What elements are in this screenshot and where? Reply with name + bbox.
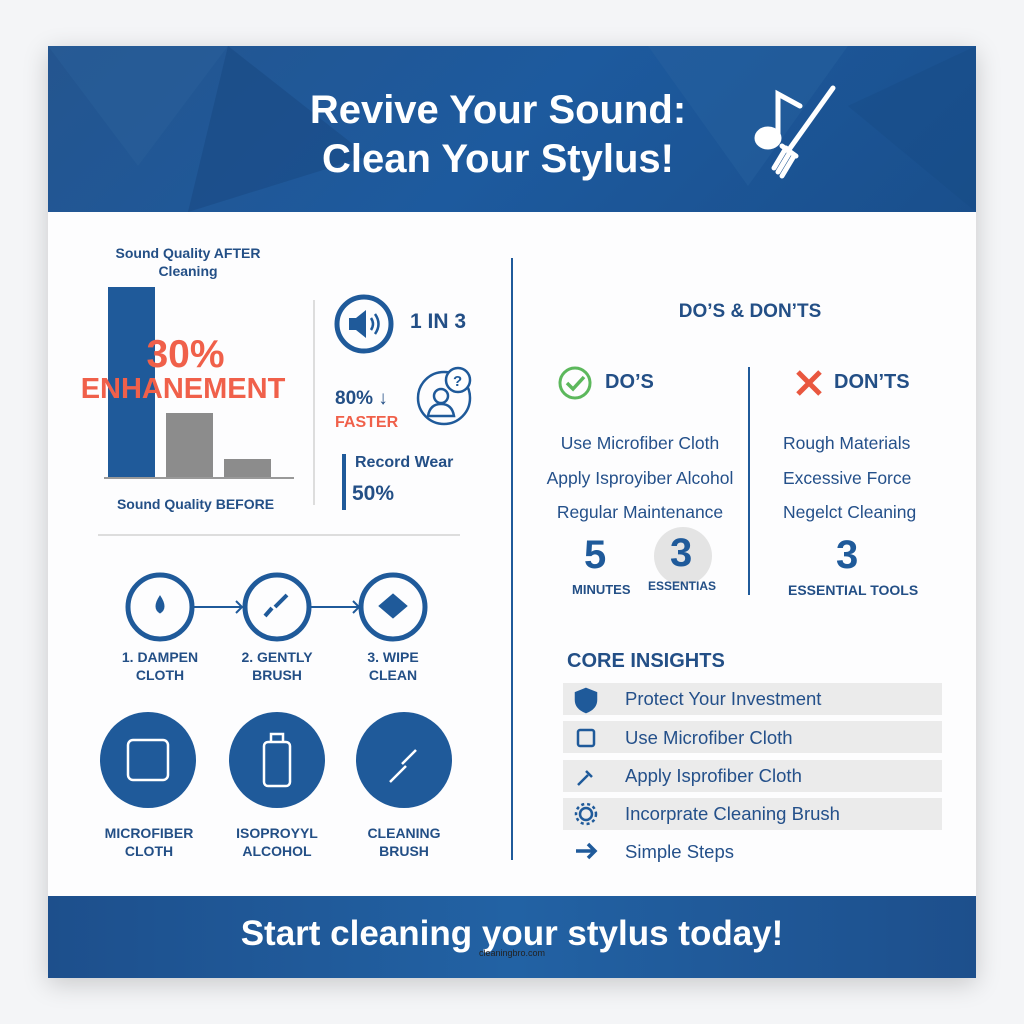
text: Simple Steps (625, 841, 734, 862)
stats column: Record Wear (355, 454, 453, 471)
steps process: 1. DAMPEN (122, 649, 198, 665)
do's and don'ts: ESSENTIAS (648, 579, 716, 593)
chart: sound quality bars (81, 245, 294, 512)
do's and don'ts: Use Microfiber Cloth (561, 433, 719, 453)
do's and don'ts: MINUTES (572, 582, 630, 597)
stats column: 1 IN 3 (410, 310, 466, 333)
tools icons: MICROFIBER (105, 825, 193, 841)
title (310, 88, 686, 181)
steps process: BRUSH (252, 667, 302, 683)
stats column: FASTER (335, 414, 398, 431)
tools icons: CLEANING (367, 825, 441, 841)
do's and don'ts: 5 (584, 533, 606, 577)
steps process: 2. GENTLY (241, 649, 313, 665)
steps process: CLOTH (136, 667, 184, 683)
do's and don'ts: Regular Maintenance (557, 502, 723, 522)
title: Revive Your Sound: (310, 88, 686, 132)
tools icons: BRUSH (379, 843, 429, 859)
steps process (122, 572, 428, 683)
icon: user question: ? (453, 373, 462, 390)
icon: red x (796, 370, 822, 396)
title: Clean Your Stylus! (322, 137, 674, 181)
icon: user question (416, 366, 472, 426)
text: Apply Isprofiber Cloth (625, 765, 802, 786)
footer banner: cleaningbro.com (479, 948, 545, 958)
text: Protect Your Investment (625, 688, 821, 709)
insight icons (574, 688, 598, 860)
icon: check circle (558, 366, 592, 400)
do's and don'ts: Negelct Cleaning (783, 502, 916, 522)
do's and don'ts: 3 (836, 533, 858, 577)
tools icons: ALCOHOL (242, 843, 312, 859)
do's and don'ts: Excessive Force (783, 468, 911, 488)
do's and don'ts: DO’S & DON’TS (679, 301, 821, 322)
core insights: CORE INSIGHTS (567, 650, 725, 672)
do's and don'ts: DON’TS (834, 371, 910, 393)
footer banner: Start cleaning your stylus today! (241, 914, 783, 953)
do's and don'ts (546, 301, 918, 598)
text: Use Microfiber Cloth (625, 727, 793, 748)
icon: music note brush (754, 86, 836, 178)
chart: sound quality bars: 30% (146, 333, 225, 376)
tools icons: ISOPROYYL (236, 825, 318, 841)
steps process: CLEAN (369, 667, 417, 683)
steps process: 3. WIPE (367, 649, 419, 665)
do's and don'ts: DO’S (605, 371, 654, 393)
tools icons (100, 712, 452, 859)
do's and don'ts: Apply Isproyiber Alcohol (547, 468, 733, 488)
do's and don'ts: ESSENTIAL TOOLS (788, 582, 918, 598)
icon: speaker (334, 294, 394, 354)
chart: sound quality bars: Sound Quality BEFORE (117, 496, 274, 512)
footer banner (48, 896, 976, 978)
do's and don'ts: 3 (670, 531, 692, 575)
text: Incorprate Cleaning Brush (625, 803, 840, 824)
chart: sound quality bars: ENHANEMENT (81, 373, 285, 405)
do's and don'ts: Rough Materials (783, 433, 910, 453)
header banner (48, 46, 976, 212)
stats column: 50% (352, 482, 394, 505)
tools icons: CLOTH (125, 843, 173, 859)
chart: sound quality bars: Sound Quality AFTER Cleaning (116, 245, 260, 279)
stats column (334, 294, 472, 510)
stats column: 80% ↓ (335, 388, 388, 409)
